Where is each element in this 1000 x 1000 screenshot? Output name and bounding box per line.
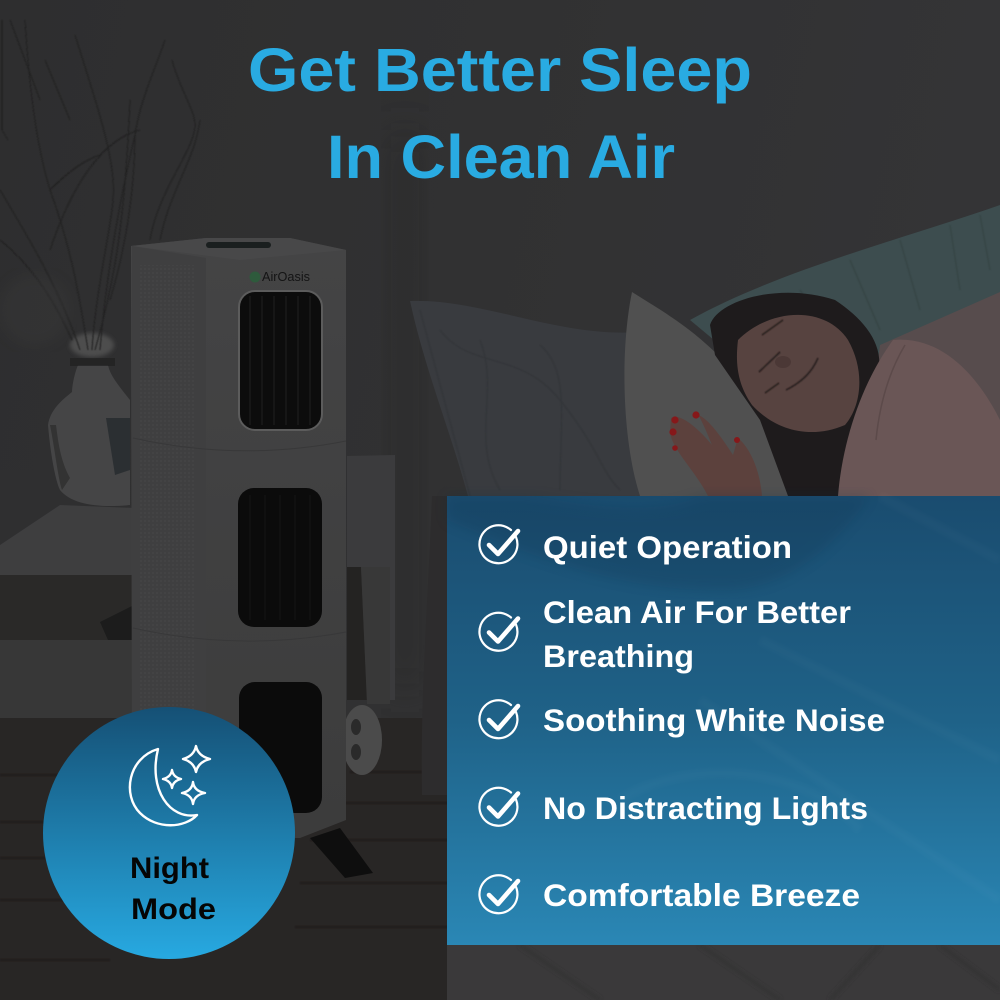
title — [248, 36, 752, 191]
title: In Clean Air — [327, 123, 675, 191]
sleeping woman — [669, 293, 1000, 496]
panel: benefits list — [447, 496, 1000, 945]
logo: AirOasis: AirOasis — [262, 269, 310, 284]
item: Quiet Operation — [479, 525, 792, 565]
caster wheel — [342, 705, 382, 775]
item: Clean Air For Better Breathing — [479, 594, 851, 674]
icon: moon and stars — [130, 746, 210, 825]
bed side — [422, 496, 447, 795]
badge: night mode — [43, 707, 295, 959]
floor — [0, 718, 450, 1000]
air purifier tower — [131, 238, 373, 878]
badge: night mode: Mode — [131, 893, 216, 926]
badge: night mode: Night — [130, 852, 209, 885]
feet — [310, 828, 373, 878]
bed pillows — [410, 205, 1000, 496]
item: No Distracting Lights: No Distracting Lights — [543, 790, 868, 826]
hand — [670, 413, 762, 496]
title: Get Better Sleep — [248, 36, 752, 104]
item: Clean Air For Better Breathing: Clean Air For Better — [543, 594, 851, 630]
side table and shelf left of tower — [0, 455, 395, 718]
item: Comfortable Breeze: Comfortable Breeze — [543, 877, 860, 913]
blanket below panel — [447, 945, 1000, 1000]
filter windows — [238, 291, 322, 813]
item: Quiet Operation: Quiet Operation — [543, 529, 792, 565]
item: Clean Air For Better Breathing: Breathing — [543, 638, 694, 674]
vase with dry branches — [0, 20, 200, 506]
item: Soothing White Noise: Soothing White Noise — [543, 702, 885, 738]
